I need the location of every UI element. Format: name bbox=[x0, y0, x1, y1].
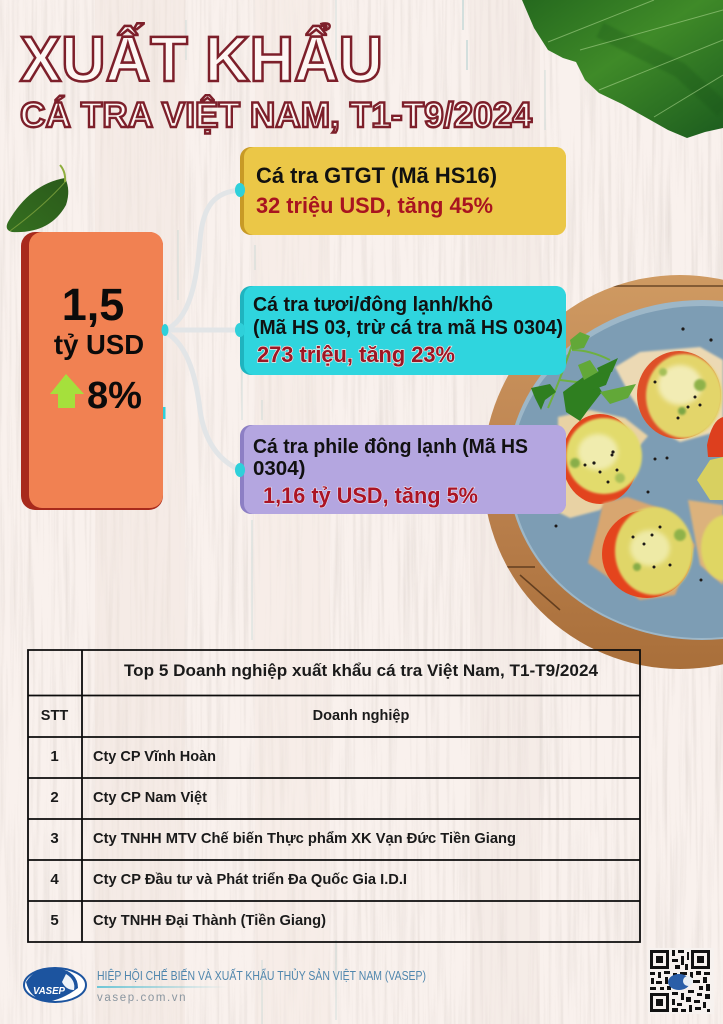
footer: VASEP logo: VASEP bbox=[33, 986, 65, 997]
title line 1: XUẤT KHẨU bbox=[20, 22, 383, 95]
row 5: 5 bbox=[50, 912, 59, 929]
food portion 3 bbox=[588, 497, 695, 600]
icon: up arrow bbox=[50, 374, 84, 408]
connector lines bbox=[165, 190, 240, 470]
column headers: Doanh nghiệp bbox=[313, 708, 409, 724]
row 4: Cty CP Đầu tư và Phát triển Đa Quốc Gia I.D.I bbox=[93, 871, 407, 888]
table: top 5 companies bbox=[28, 650, 640, 942]
card heading second line: 0304) bbox=[253, 457, 305, 480]
QR centre logo bbox=[668, 974, 690, 990]
row 1: 1 bbox=[50, 748, 59, 765]
card: fresh frozen dried products bbox=[240, 286, 566, 375]
row 2: Cty CP Nam Việt bbox=[93, 789, 207, 806]
decorative large leaf, top right bbox=[522, 0, 723, 138]
footer: organization name: HIỆP HỘI CHẾ BIẾN VÀ XUẤT KHẨU THỦY SẢN VIỆT NAM (VASEP) bbox=[97, 968, 426, 983]
card value: 273 triệu, tăng 23% bbox=[257, 342, 455, 367]
row 2: 2 bbox=[50, 789, 59, 806]
main total card bbox=[21, 232, 163, 510]
decorative small leaf bbox=[7, 165, 68, 232]
food portion 1 bbox=[615, 347, 723, 442]
title line 2: CÁ TRA VIỆT NAM, T1-T9/2024 bbox=[20, 95, 532, 135]
title bbox=[20, 22, 532, 135]
row 3: Cty TNHH MTV Chế biến Thực phẩm XK Vạn Đức Tiền Giang bbox=[93, 830, 516, 847]
footer: divider line bbox=[97, 986, 227, 988]
growth rate: 8% bbox=[87, 375, 142, 417]
card heading: Cá tra phile đông lạnh (Mã HS bbox=[253, 435, 528, 458]
sesame seeds bbox=[554, 327, 713, 582]
card heading second line: (Mã HS 03, trừ cá tra mã HS 0304) bbox=[253, 316, 563, 339]
row 4: 4 bbox=[50, 871, 59, 888]
card: frozen fillet products bbox=[240, 425, 566, 514]
footer: VASEP logo bbox=[24, 968, 86, 1002]
food portion 4 bbox=[688, 417, 723, 585]
footer: website: vasep.com.vn bbox=[97, 992, 187, 1004]
food portion 2 bbox=[558, 410, 648, 518]
row 5: Cty TNHH Đại Thành (Tiền Giang) bbox=[93, 912, 326, 929]
parsley garnish bbox=[531, 332, 636, 421]
card value: 1,16 tỷ USD, tăng 5% bbox=[263, 483, 478, 508]
food plate photo bbox=[483, 275, 723, 669]
unit: tỷ USD bbox=[54, 329, 144, 360]
card heading: Cá tra GTGT (Mã HS16) bbox=[256, 163, 497, 188]
table title: Top 5 Doanh nghiệp xuất khẩu cá tra Việt Nam, T1-T9/2024 bbox=[124, 661, 599, 680]
blue plate bbox=[508, 300, 723, 640]
card value: 32 triệu USD, tăng 45% bbox=[256, 193, 493, 218]
row 3: 3 bbox=[50, 830, 59, 847]
connector node: main card bbox=[162, 324, 168, 419]
row 1: Cty CP Vĩnh Hoàn bbox=[93, 748, 216, 765]
column headers bbox=[41, 708, 409, 724]
total value: 1,5 bbox=[62, 279, 124, 330]
wooden board bbox=[483, 275, 723, 669]
card heading: Cá tra tươi/đông lạnh/khô bbox=[253, 293, 493, 316]
connector nodes: cards bbox=[235, 183, 245, 477]
card: value added products bbox=[240, 147, 566, 235]
column headers: STT bbox=[41, 708, 68, 724]
QR code bbox=[648, 948, 714, 1014]
